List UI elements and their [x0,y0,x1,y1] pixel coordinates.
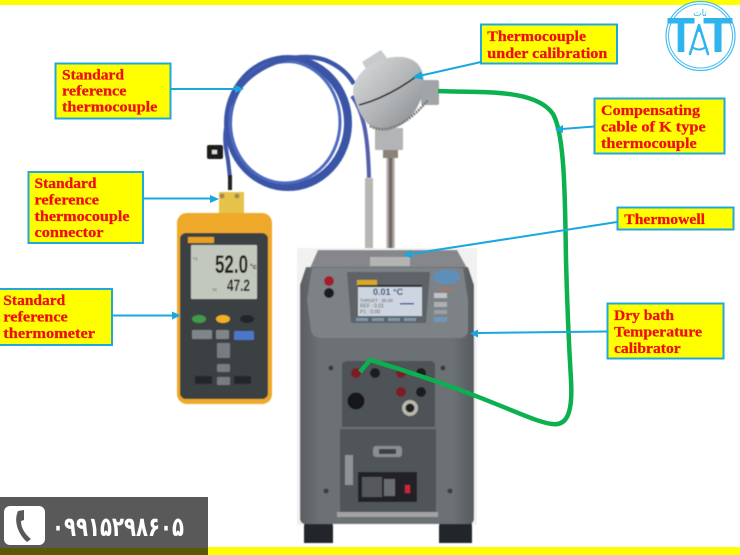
arrow: to compensating cable [555,125,594,133]
head body [353,57,424,131]
label: compensating cable of K type thermocouple: thermocouple [601,136,697,152]
label: standard reference thermocouple connector: reference [34,192,99,208]
label: dry bath temperature calibrator: Dry bath [614,308,675,324]
calibrator top plate [310,250,467,268]
label: standard reference thermocouple: Standard [62,68,125,84]
logo: TAT: T [703,9,733,63]
logo: TAT: تات [693,8,707,18]
calibrator control panel [307,268,468,338]
calibrator screen: 0.01 °C [373,287,404,297]
label: thermocouple under calibration: under calibration [487,46,608,62]
calibrator screen: P1 : 0.00 [360,310,380,316]
thermometer display: 47.2 [227,276,250,295]
arrow: to thermowell [403,222,617,258]
icon: compass [690,25,708,54]
label: dry bath temperature calibrator: calibrator [614,341,681,357]
label: standard reference thermocouple connector: thermocouple [34,209,130,225]
dry bath temperature calibrator [297,248,477,543]
arrow: to calibrator [470,330,607,338]
label: standard reference thermocouple connector: Standard [34,176,97,192]
thermometer display: 52.0 [215,251,248,279]
head lid cap [362,50,387,72]
label: standard reference thermocouple: reference [62,84,127,100]
arrow: to connector [143,195,219,203]
thermometer buttons [192,315,254,385]
label: dry bath temperature calibrator: Temperature [614,324,702,340]
label: thermocouple under calibration [481,24,617,64]
calibrator input terminal panel [342,361,435,427]
thermometer display: T1 [193,256,198,261]
green compensating cable [360,91,571,424]
arrow: to thermocouple head [412,62,481,80]
label: standard reference thermocouple [56,64,170,118]
blue standard reference thermocouple cable [207,57,369,214]
label: compensating cable of K type thermocouple: Compensating [601,103,701,119]
head chain [370,100,428,129]
bottom yellow bar [208,547,740,555]
calibrator body [300,267,474,524]
label: thermowell [618,208,734,230]
calibrator screen: TARGET : 50.00 [360,298,393,303]
calibrator screen [358,285,422,316]
calibrator keys [356,270,460,322]
arrow: to thermocouple cable [171,85,244,93]
thermometer display: °c [250,263,257,271]
label: thermocouple under calibration: Thermocouple [487,29,586,45]
thermowell and probes [365,156,395,256]
label: standard reference thermocouple connector [28,172,143,243]
logo: TAT [666,2,735,70]
icon: telephone [4,506,45,545]
calibrator screen: REF : 0.01 [360,304,384,310]
calibrator screws [324,366,452,494]
thermocouple under calibration head [353,50,439,158]
label: standard reference thermometer: Standard [3,293,66,309]
label: standard reference thermometer [0,289,112,345]
label: standard reference thermocouple connector: connector [34,225,104,241]
label: standard reference thermocouple: thermocouple [62,100,158,116]
label: compensating cable of K type thermocouple [594,98,724,154]
logo: TAT: T [667,9,695,63]
standard reference thermometer [177,213,272,404]
thermometer display: T2 [212,287,217,292]
calibrator rear connector panel [337,429,438,517]
label: dry bath temperature calibrator [608,304,724,358]
label: compensating cable of K type thermocouple: cable of K type [601,120,706,136]
thermometer display [191,245,257,299]
label: standard reference thermometer: thermometer [3,326,95,342]
phone number: ۰۹۹۱۵۲۹۸۶۰۵ [52,512,184,543]
label: thermowell: Thermowell [624,212,705,228]
label: standard reference thermometer: reference [3,310,68,326]
phone panel [0,497,208,555]
arrow: to thermometer [112,312,181,320]
calibrator test jacks [324,276,334,298]
thermometer brand strip [188,237,214,243]
icon: black cable tag [207,145,223,159]
thermocouple connector [219,192,244,214]
cable gland [421,80,439,105]
top yellow bar [0,0,740,5]
terminal neck [375,128,403,150]
calibrator feet [304,523,472,543]
